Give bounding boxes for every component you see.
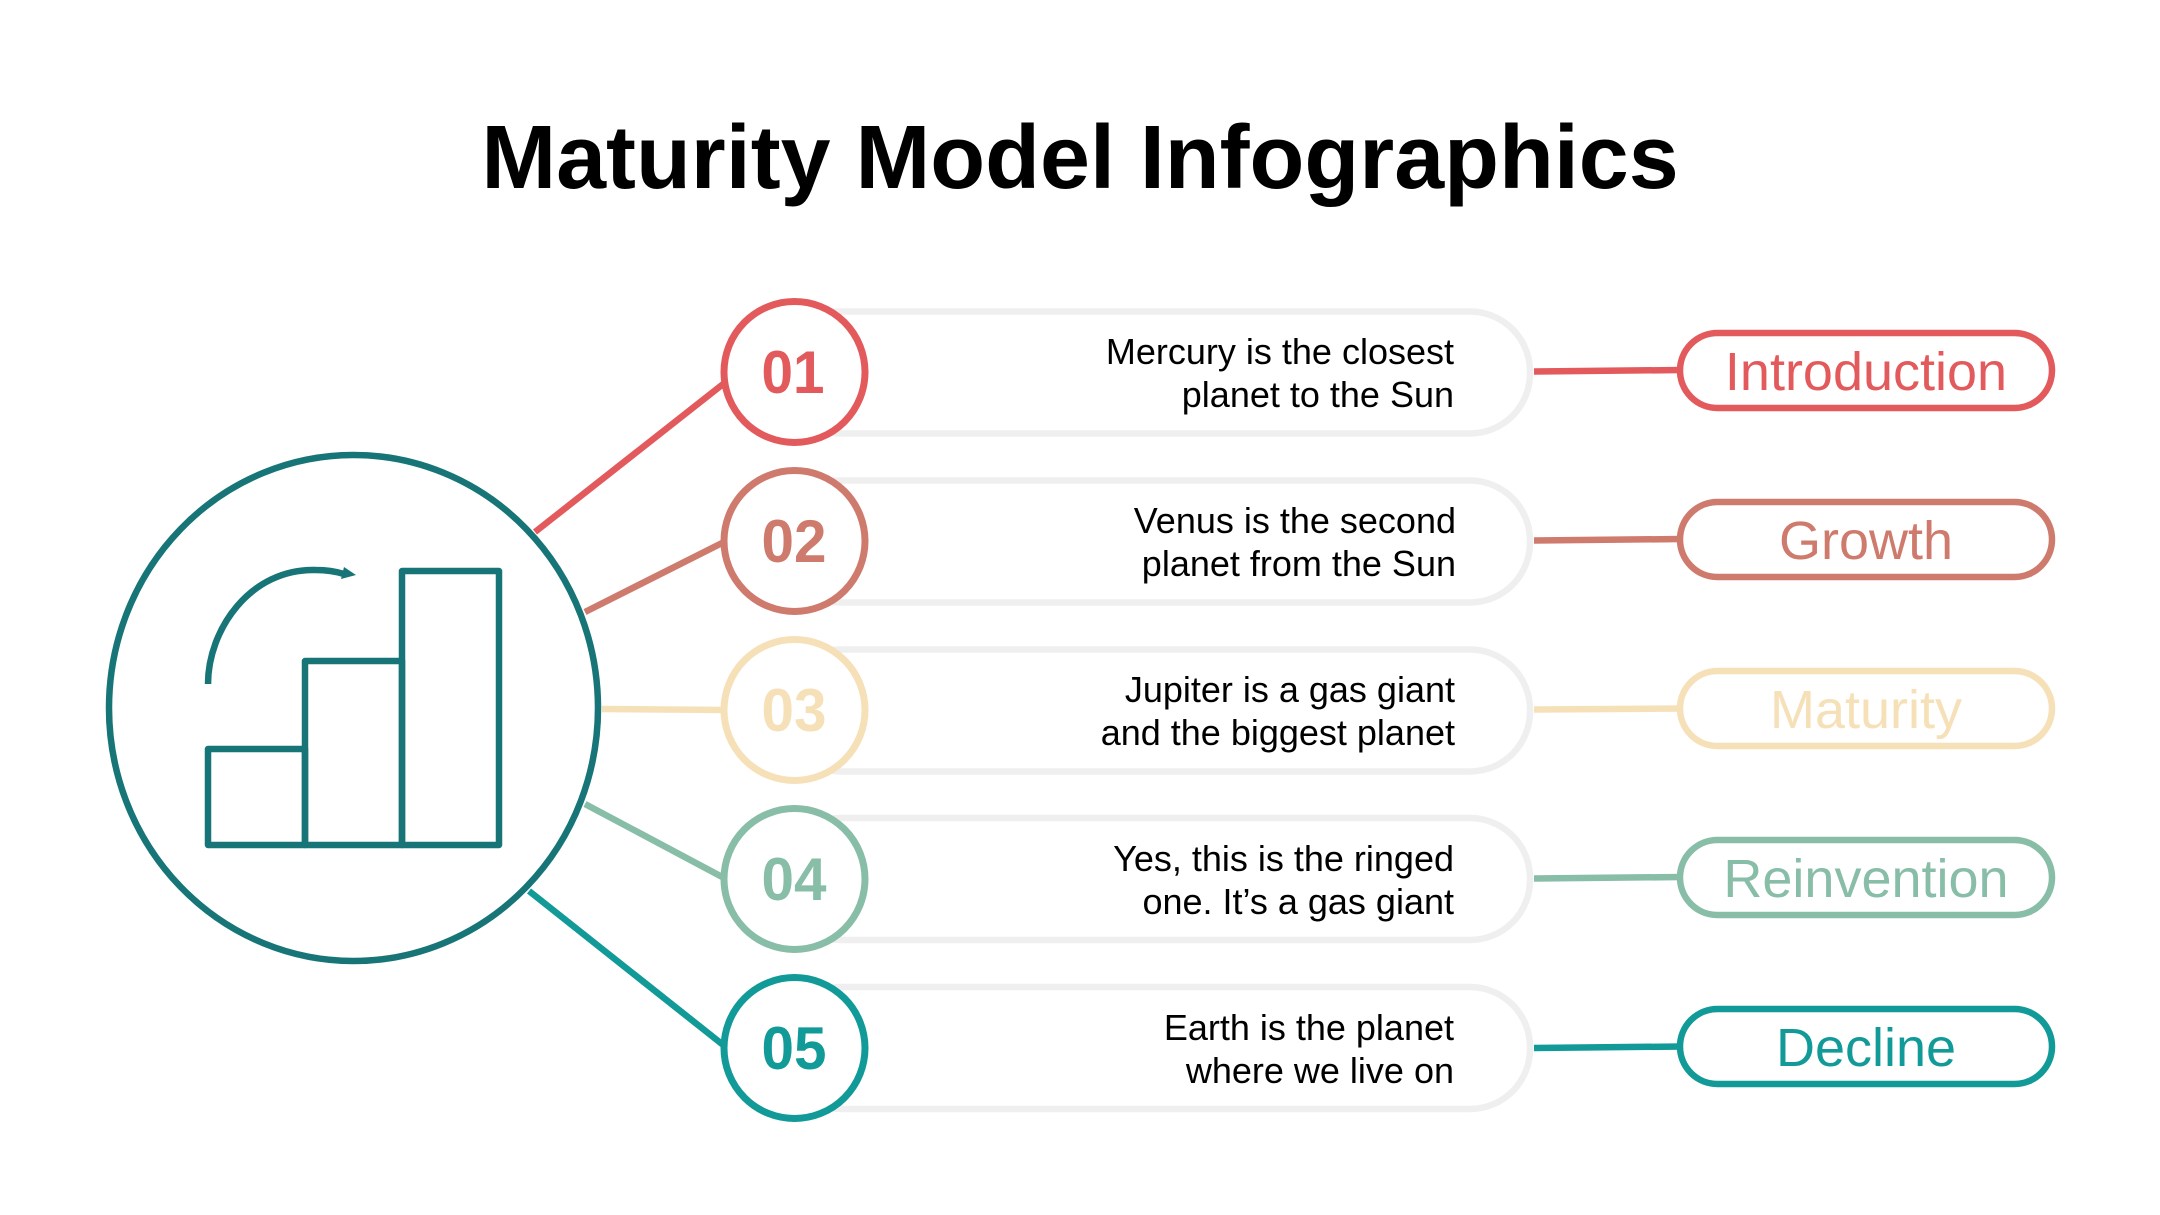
- number badge 01: 01: [762, 339, 824, 406]
- panel: description pill 05: [780, 987, 1530, 1109]
- label: Reinvention: [1680, 840, 2052, 915]
- connector to label 02: [1534, 539, 1682, 540]
- connector lines from hub to numbered circles: [529, 381, 727, 1048]
- description 03: and the biggest planet: [1101, 712, 1455, 753]
- description 01: Mercury is the closest: [1106, 331, 1454, 372]
- number badge 04: [724, 808, 865, 950]
- label: Reinvention: Reinvention: [1723, 849, 2009, 909]
- number badge 02: 02: [762, 508, 826, 575]
- description 03: Jupiter is a gas giant: [1125, 669, 1455, 710]
- connector to label 04: [1534, 877, 1682, 878]
- description 02: planet from the Sun: [1142, 543, 1456, 584]
- label: Decline: [1680, 1009, 2052, 1084]
- label: Maturity: [1680, 671, 2052, 746]
- hub circle with chart icon: [109, 455, 598, 961]
- number badge 02: [724, 470, 865, 612]
- description 05: Earth is the planet: [1164, 1007, 1454, 1048]
- connector to label 01: [1534, 370, 1682, 372]
- icon: rising bars: [208, 571, 499, 845]
- description 01: planet to the Sun: [1182, 374, 1454, 415]
- description 04: one. It’s a gas giant: [1142, 881, 1454, 922]
- row 02: Growth: [724, 470, 2052, 612]
- panel: description pill 04: [780, 818, 1530, 940]
- number badge 01: [724, 302, 865, 442]
- label: Maturity: Maturity: [1770, 680, 1962, 740]
- title: Maturity Model Infographics: [481, 108, 1679, 208]
- panel: description pill 03: [780, 650, 1530, 772]
- connector to label 05: [1534, 1046, 1682, 1048]
- description 04: Yes, this is the ringed: [1113, 838, 1454, 879]
- number badge 04: 04: [762, 846, 827, 913]
- icon: curved arrow: [208, 567, 356, 684]
- number badge 05: 05: [762, 1015, 826, 1082]
- label: Decline: Decline: [1776, 1018, 1956, 1078]
- label: Introduction: [1680, 333, 2052, 408]
- connector to label 03: [1534, 708, 1682, 710]
- number badge 03: 03: [762, 677, 826, 744]
- number badge 05: [724, 978, 865, 1118]
- description 05: where we live on: [1185, 1050, 1454, 1091]
- label: Growth: [1680, 502, 2052, 577]
- description 02: Venus is the second: [1134, 500, 1456, 541]
- row 04: Reinvention: [724, 808, 2052, 950]
- row 05: Decline: [724, 978, 2052, 1118]
- label: Growth: Growth: [1779, 511, 1953, 571]
- row 03: Maturity: [724, 640, 2052, 780]
- row 01: Introduction: [724, 302, 2052, 442]
- panel: description pill 02: [780, 480, 1530, 602]
- panel: description pill 01: [780, 312, 1530, 434]
- label: Introduction: Introduction: [1725, 342, 2007, 402]
- number badge 03: [724, 640, 865, 780]
